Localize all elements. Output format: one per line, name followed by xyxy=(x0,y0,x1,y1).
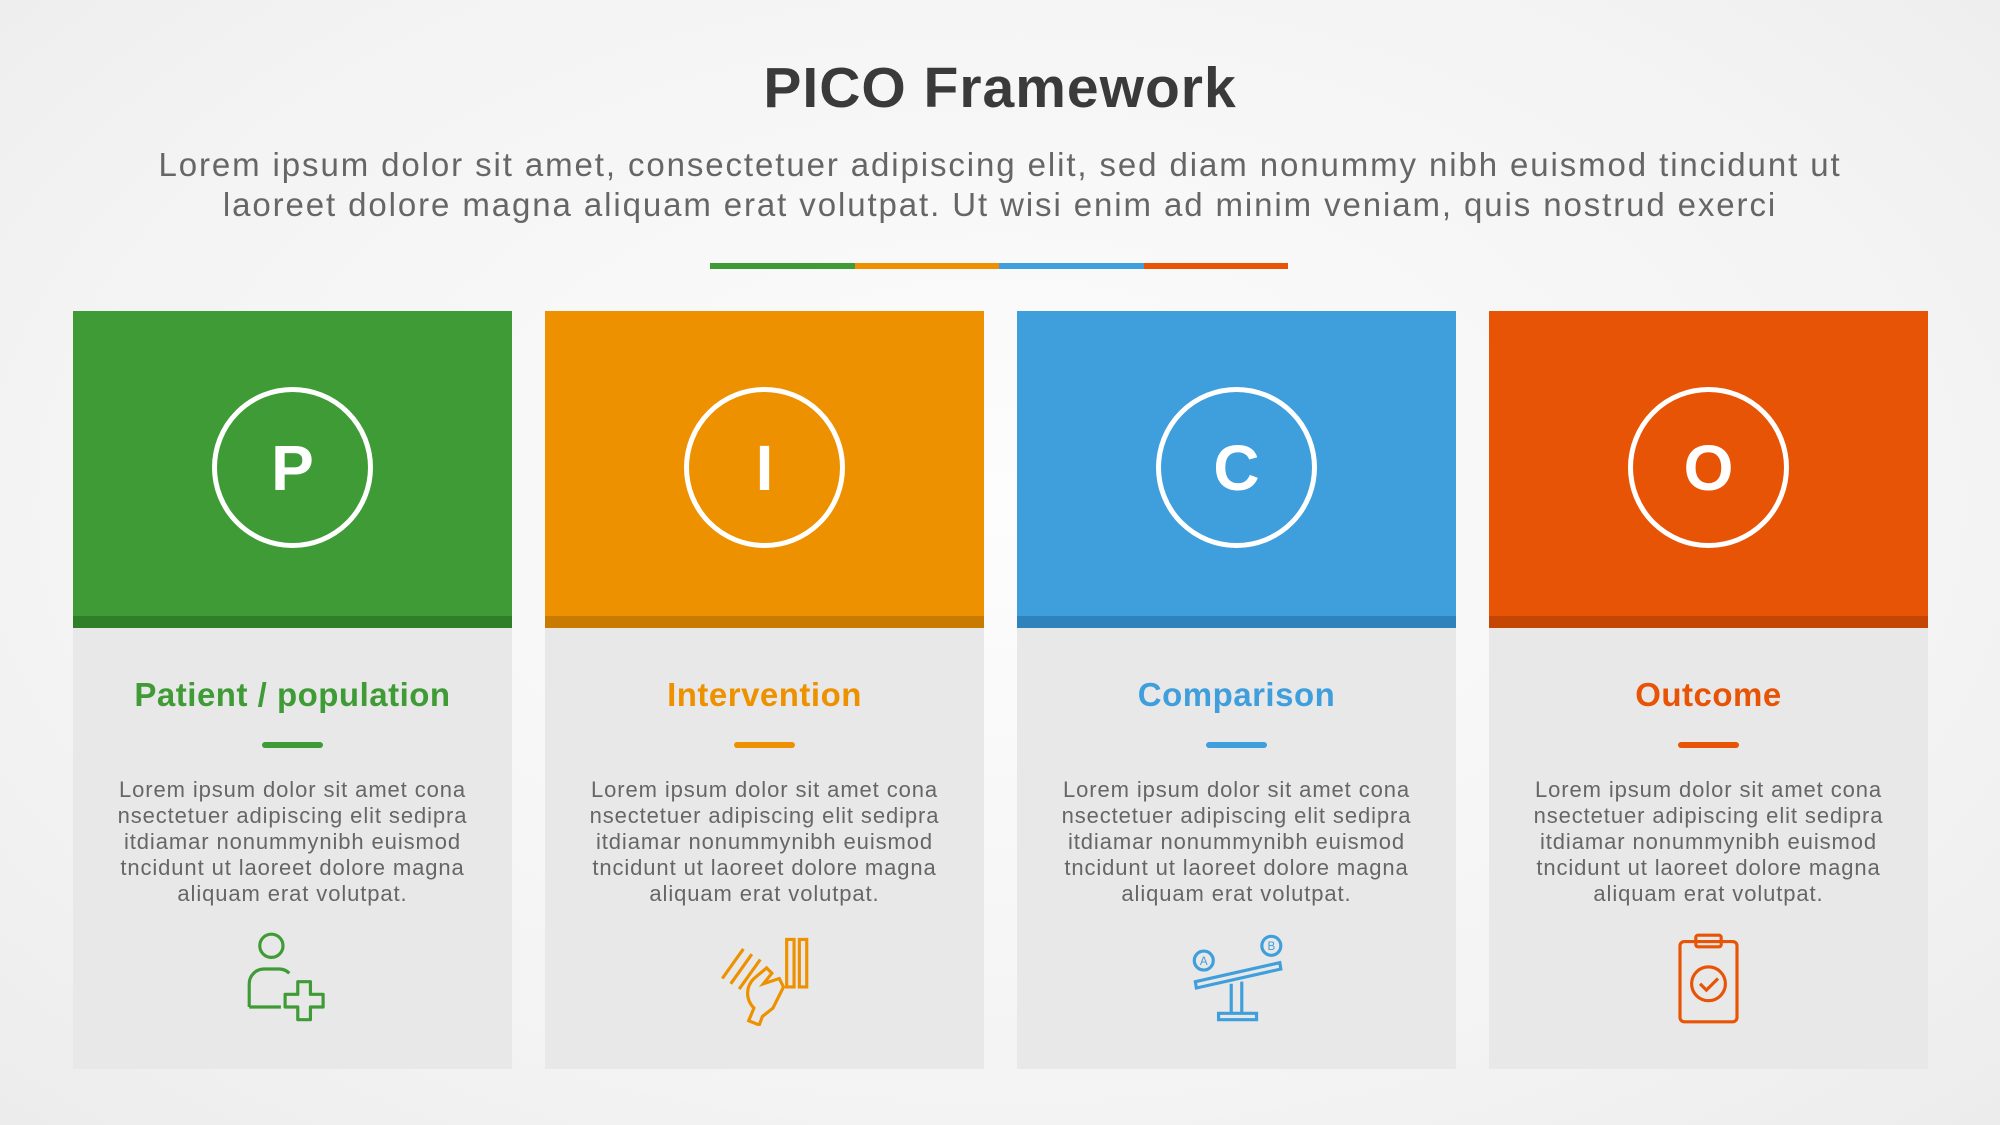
text outcome: Lorem ipsum dolor sit amet cona xyxy=(1535,777,1882,802)
letter circle C xyxy=(1156,387,1317,548)
icon: comparison: B xyxy=(1267,940,1275,953)
letter circle P: P xyxy=(271,432,314,504)
panel: comparison xyxy=(1017,311,1456,1069)
text patient: aliquam erat volutpat. xyxy=(177,881,408,906)
subtitle xyxy=(158,146,1842,223)
letter circle I xyxy=(684,387,845,548)
title: PICO Framework xyxy=(763,56,1237,120)
letter circle P xyxy=(212,387,373,548)
text comparison: aliquam erat volutpat. xyxy=(1121,881,1352,906)
letter circle C: C xyxy=(1213,432,1260,504)
subtitle: laoreet dolore magna aliquam erat volutpat. Ut wisi enim ad minim veniam, quis nostrud exerci xyxy=(223,186,1777,223)
text outcome: nsectetuer adipiscing elit sedipra xyxy=(1534,803,1883,828)
heading comparison: Comparison xyxy=(1138,676,1335,713)
heading patient: Patient / population xyxy=(134,676,451,713)
text intervention: itdiamar nonummynibh euismod xyxy=(596,829,933,854)
icon: patient xyxy=(248,932,325,1022)
icon: intervention xyxy=(721,938,808,1026)
text comparison xyxy=(1062,777,1411,906)
text comparison: nsectetuer adipiscing elit sedipra xyxy=(1062,803,1411,828)
icon: outcome xyxy=(1678,934,1739,1024)
text intervention: tncidunt ut laoreet dolore magna xyxy=(592,855,937,880)
color bar xyxy=(710,263,1288,269)
text intervention: nsectetuer adipiscing elit sedipra xyxy=(590,803,939,828)
letter circle O: O xyxy=(1684,432,1733,504)
text comparison: itdiamar nonummynibh euismod xyxy=(1068,829,1405,854)
letter circle I: I xyxy=(756,432,773,504)
text outcome: itdiamar nonummynibh euismod xyxy=(1540,829,1877,854)
icon: comparison: A xyxy=(1200,955,1208,968)
text outcome: aliquam erat volutpat. xyxy=(1593,881,1824,906)
text intervention: Lorem ipsum dolor sit amet cona xyxy=(591,777,938,802)
panel: patient xyxy=(73,311,512,1069)
text comparison: tncidunt ut laoreet dolore magna xyxy=(1064,855,1409,880)
text patient: nsectetuer adipiscing elit sedipra xyxy=(118,803,467,828)
panel: outcome xyxy=(1489,311,1928,1069)
text intervention xyxy=(590,777,939,906)
icon: comparison xyxy=(1192,934,1283,1022)
letter circle O xyxy=(1628,387,1789,548)
text outcome: tncidunt ut laoreet dolore magna xyxy=(1536,855,1881,880)
heading intervention: Intervention xyxy=(667,676,862,713)
text patient: tncidunt ut laoreet dolore magna xyxy=(120,855,465,880)
text patient: Lorem ipsum dolor sit amet cona xyxy=(119,777,466,802)
text patient: itdiamar nonummynibh euismod xyxy=(124,829,461,854)
text intervention: aliquam erat volutpat. xyxy=(649,881,880,906)
text outcome xyxy=(1534,777,1883,906)
text comparison: Lorem ipsum dolor sit amet cona xyxy=(1063,777,1410,802)
heading outcome: Outcome xyxy=(1635,676,1782,713)
subtitle: Lorem ipsum dolor sit amet, consectetuer adipiscing elit, sed diam nonummy nibh euismod tincidunt ut xyxy=(158,146,1842,183)
panel: intervention xyxy=(545,311,984,1069)
text patient xyxy=(118,777,467,906)
